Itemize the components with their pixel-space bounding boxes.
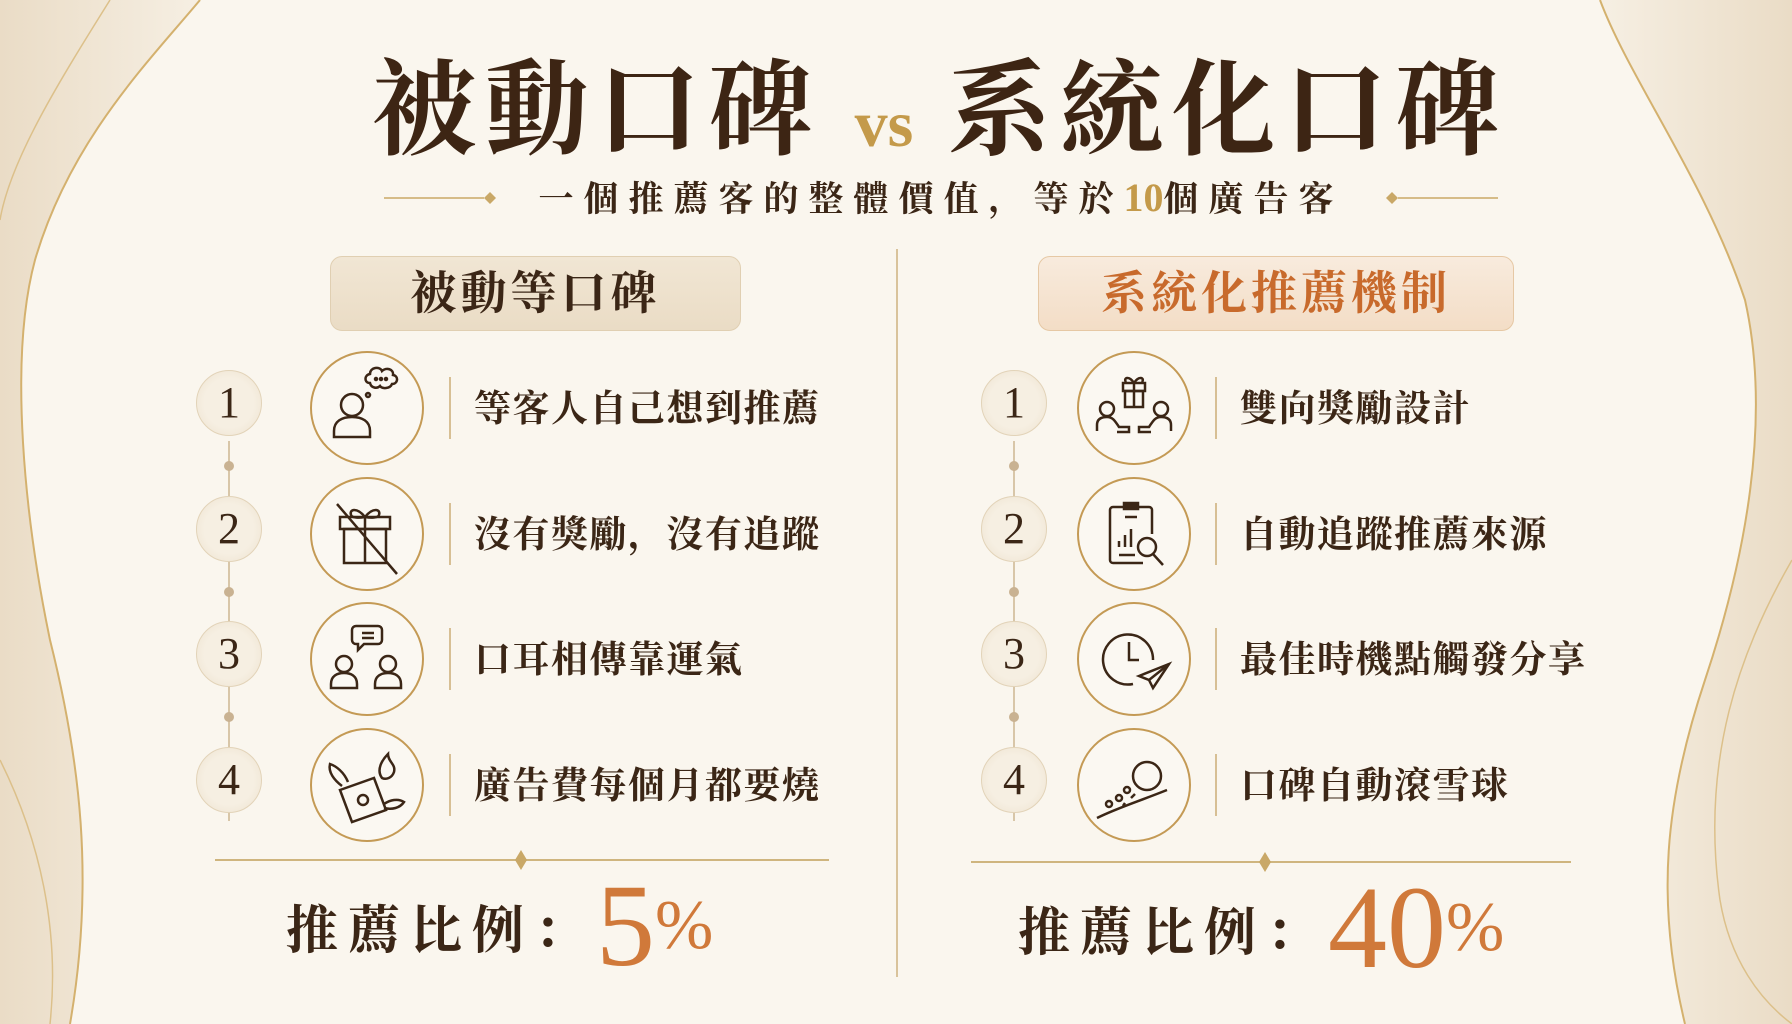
- panel: passive: [196, 256, 829, 991]
- item 4: [981, 728, 1510, 842]
- icon: snowball: [1077, 728, 1191, 842]
- item 1: 1: [1003, 378, 1025, 427]
- divider with diamond: [971, 852, 1571, 872]
- title: 被動口碑 vs 系統化口碑: [373, 54, 1507, 169]
- item 1: 雙向獎勵設計: [1240, 389, 1471, 430]
- item 3: 口耳相傳靠運氣: [474, 640, 744, 681]
- ratio: 40%: 推薦比例：40%: [1018, 862, 1504, 993]
- item 3: 3: [1003, 629, 1025, 678]
- item 2: 2: [218, 504, 240, 553]
- icon: two-way reward: [1077, 351, 1191, 465]
- item 4: 廣告費每個月都要燒: [474, 766, 820, 807]
- heading: passive: [330, 256, 741, 331]
- item 1: 1: [218, 378, 240, 427]
- ratio: 5%: 推薦比例：5%: [286, 860, 713, 991]
- item 2: 2: [1003, 504, 1025, 553]
- item 4: 4: [218, 755, 240, 804]
- heading: systematic: 系統化推薦機制: [1101, 268, 1451, 319]
- divider with diamond: [215, 850, 829, 870]
- item 4: [196, 728, 820, 842]
- icon: no gift: [310, 477, 424, 591]
- item 4: 口碑自動滾雪球: [1240, 766, 1510, 807]
- item 1: [196, 351, 820, 465]
- item 2: [196, 477, 820, 591]
- item 4: 4: [1003, 755, 1025, 804]
- icon: two people talking: [310, 602, 424, 716]
- icon: money with wings burning: [310, 728, 424, 842]
- heading: systematic: [1038, 256, 1514, 331]
- panel: systematic: [971, 256, 1586, 993]
- item 3: [196, 602, 744, 716]
- icon: clipboard analytics: [1077, 477, 1191, 591]
- icon: clock with paper plane: [1077, 602, 1191, 716]
- item 3: 最佳時機點觸發分享: [1240, 640, 1586, 681]
- item 2: 自動追蹤推薦來源: [1240, 515, 1548, 556]
- item 1: 等客人自己想到推薦: [474, 389, 820, 430]
- item 1: [981, 351, 1471, 465]
- item 3: [981, 602, 1586, 716]
- center divider: [896, 249, 898, 977]
- heading: passive: 被動等口碑: [410, 268, 660, 319]
- item 3: 3: [218, 629, 240, 678]
- icon: thinking person: [310, 351, 424, 465]
- item 2: 沒有獎勵，沒有追蹤: [474, 515, 820, 556]
- subtitle: 一個推薦客的整體價值，等於10個廣告客: [538, 175, 1344, 220]
- item 2: [981, 477, 1548, 591]
